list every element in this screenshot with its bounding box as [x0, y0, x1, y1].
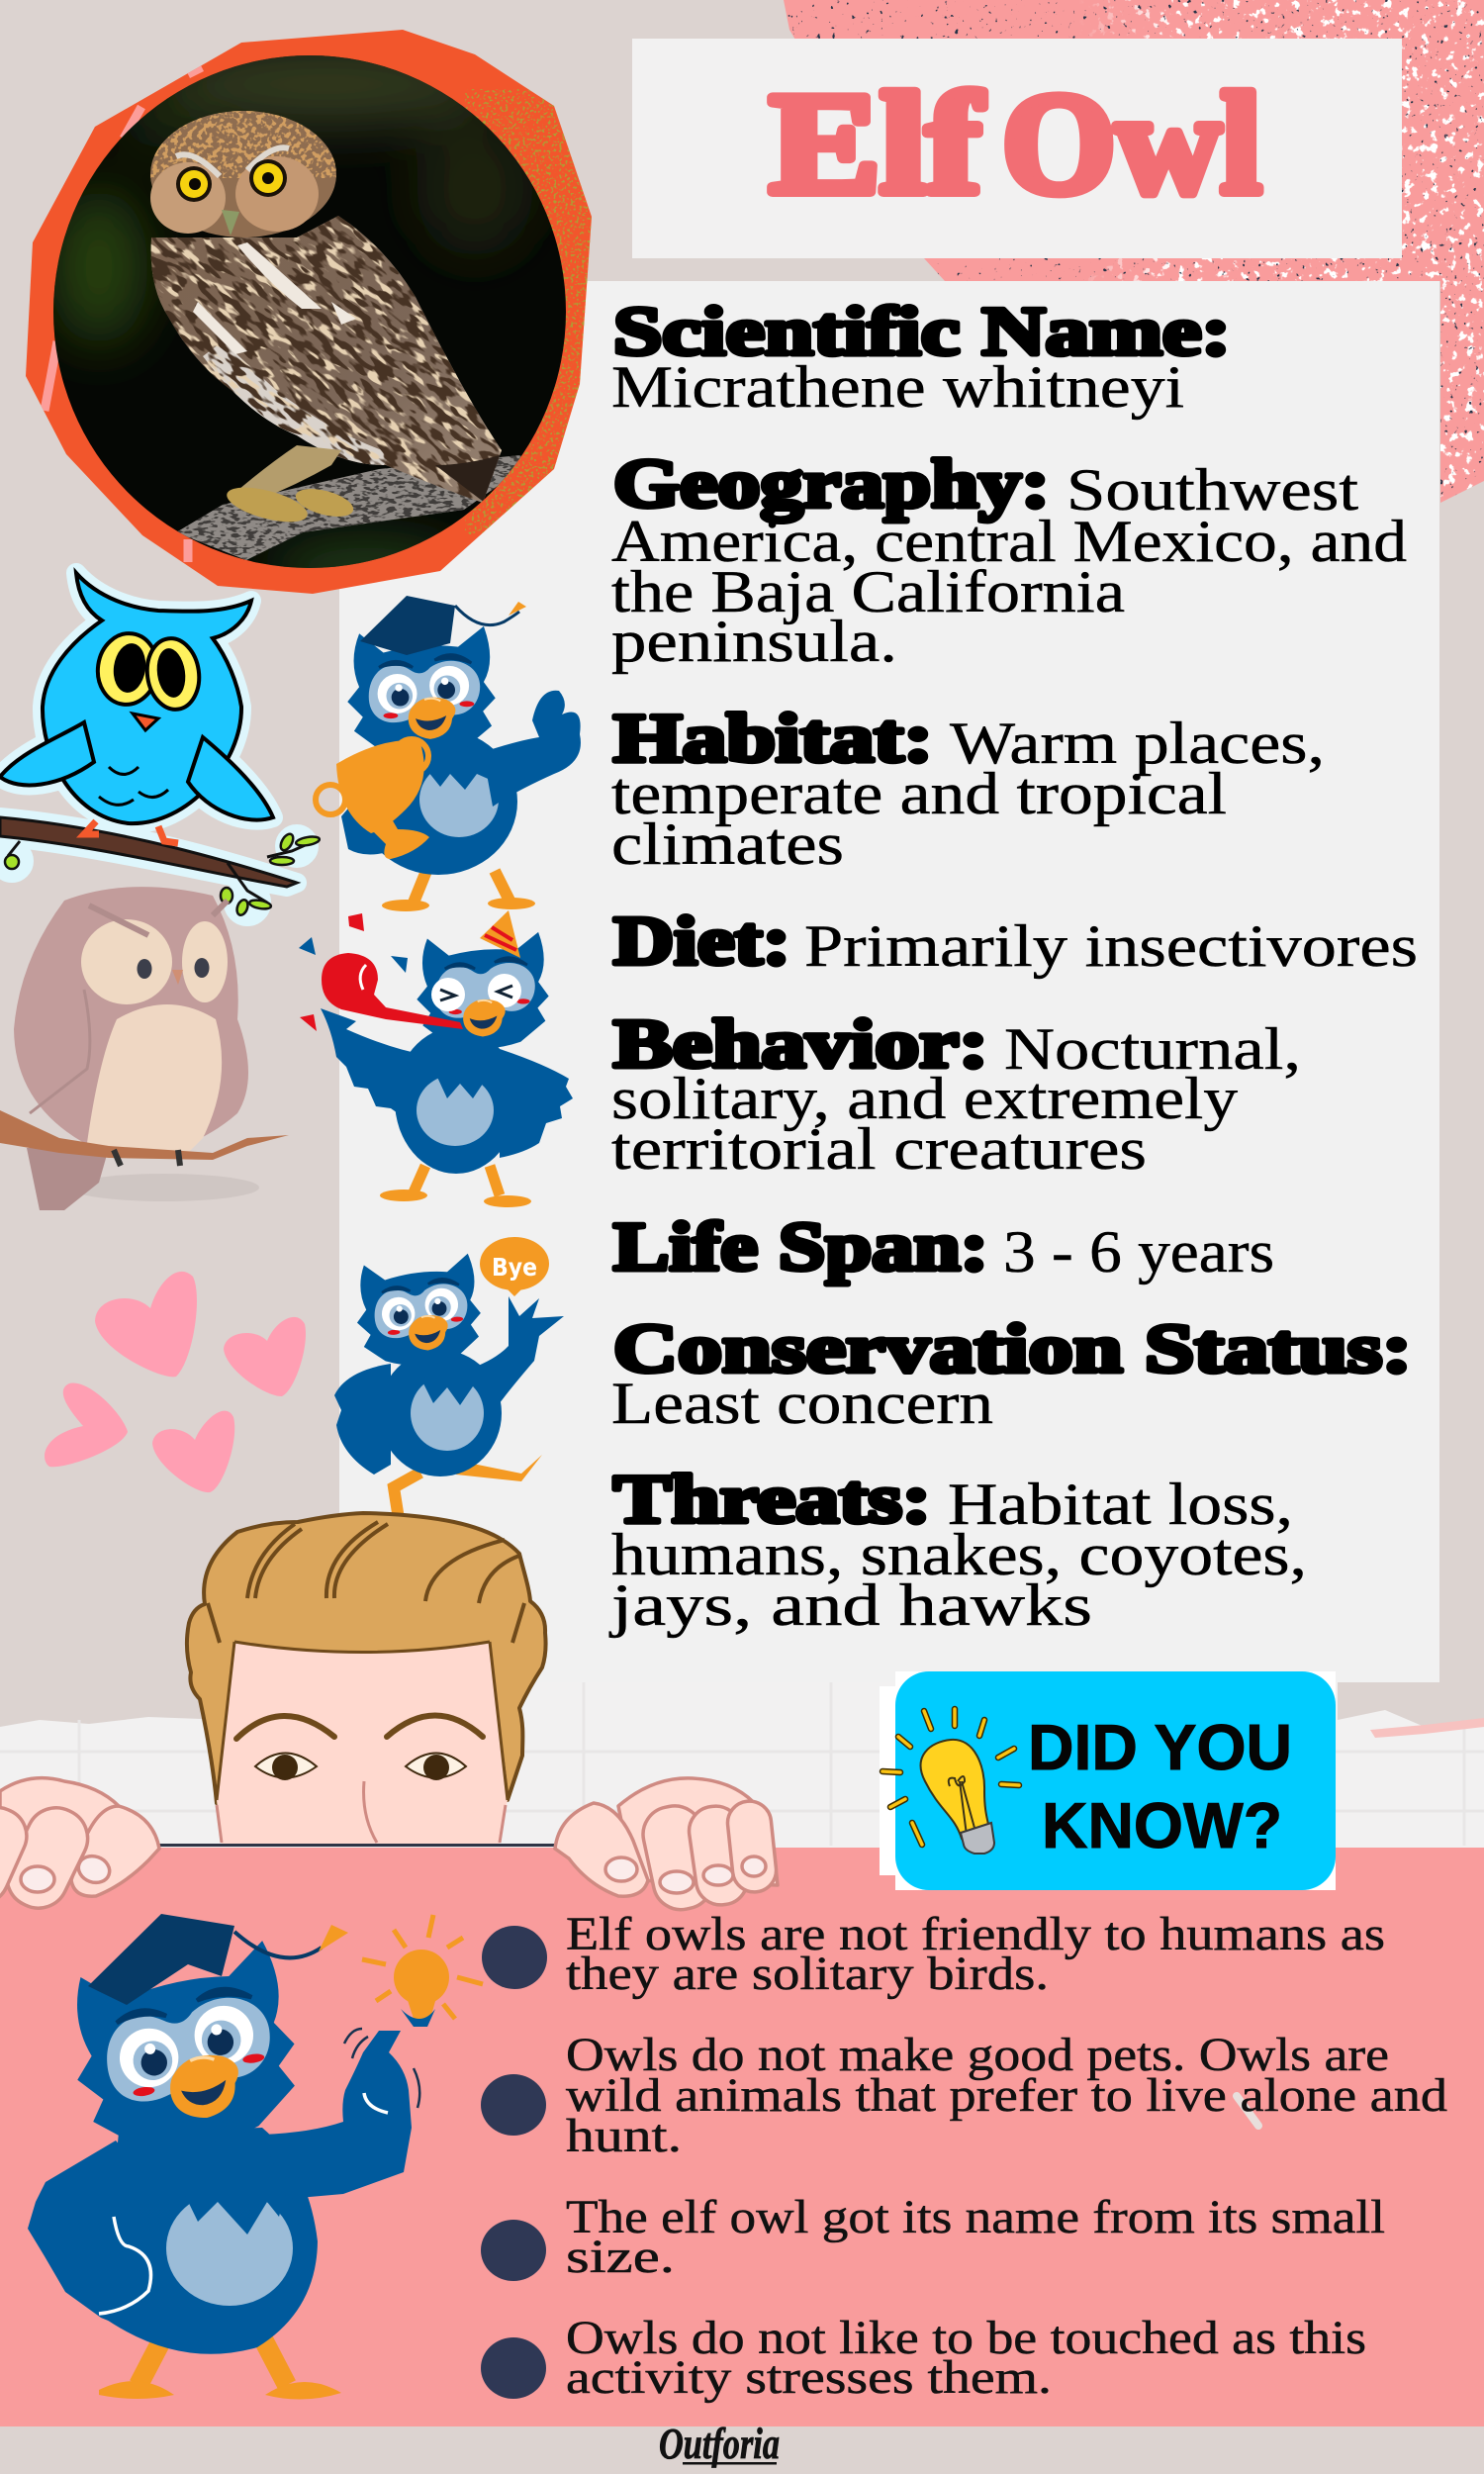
- icon: hearts: [45, 1272, 306, 1492]
- happy eyes: [431, 974, 521, 1011]
- face: [217, 1642, 508, 1845]
- fact: pets: hunt.: [566, 2110, 682, 2162]
- body: [43, 573, 251, 823]
- icon: idea bulb: [362, 1915, 483, 2027]
- icon: light bulb: [882, 1709, 1019, 1854]
- trophy: [395, 739, 428, 773]
- fact: habitat: temperate and tropical: [611, 761, 1227, 826]
- fact: friendliness: Elf owls are not friendly to humans as: [566, 1908, 1385, 1960]
- party blower: [322, 953, 463, 1029]
- fact: geography: Geography:: [613, 446, 1050, 523]
- small pale mark: [1237, 2096, 1258, 2126]
- fact: threats: [608, 1462, 1307, 1638]
- big cartoon owl with idea: [28, 1914, 483, 2400]
- photo: elf owl on branch: [26, 30, 592, 594]
- fact: scientific name: Micrathene whitneyi: [611, 354, 1184, 420]
- title box: [632, 39, 1402, 258]
- fact: behavior: territorial creatures: [611, 1116, 1147, 1182]
- fact: touching: activity stresses them.: [566, 2351, 1052, 2404]
- fact: geography: Southwest: [1067, 457, 1358, 523]
- legs: [241, 445, 341, 493]
- fact: behavior: Behavior:: [613, 1006, 988, 1083]
- fact: touching: Owls do not like to be touched as this: [566, 2312, 1366, 2364]
- graduation cap: [88, 1914, 234, 2005]
- sticker: blue owl on branch: [0, 573, 321, 916]
- fact: habitat: climates: [611, 811, 844, 877]
- fact: threats: jays, and hawks: [608, 1572, 1092, 1638]
- fact: geography: [611, 446, 1407, 674]
- did you know badge: [880, 1671, 1336, 1890]
- left hand: [0, 1778, 159, 1918]
- fact: life span: Life Span:: [613, 1209, 988, 1285]
- tabletop line: [158, 1844, 556, 1847]
- fact: touching: [566, 2312, 1366, 2404]
- did you know badge: KNOW?: [1042, 1789, 1282, 1861]
- title: [770, 63, 1261, 224]
- body: [151, 216, 502, 503]
- fact: diet: [613, 904, 1418, 980]
- fact: friendliness: they are solitary birds.: [566, 1948, 1049, 2000]
- fact: name origin: The elf owl got its name from its small: [566, 2191, 1385, 2243]
- head: [150, 111, 336, 238]
- fact: friendliness: [566, 1908, 1385, 2000]
- fact: habitat: [611, 701, 1325, 877]
- cartoon owl: party blower: [299, 910, 573, 1207]
- branch: [0, 817, 297, 887]
- fact: pets: Owls do not make good pets. Owls are: [566, 2029, 1389, 2081]
- cartoon owl: waving bye: [334, 1237, 564, 1519]
- bullet points: [481, 1926, 547, 2399]
- fact: geography: the Baja California: [611, 559, 1125, 624]
- speech bubble: Bye: [492, 1253, 537, 1282]
- fact: threats: Threats:: [613, 1462, 931, 1538]
- logo: Outforia: Outforia: [659, 2420, 780, 2468]
- graduation cap: [360, 596, 455, 655]
- cartoon owl: graduate with trophy: [316, 596, 581, 911]
- facts panel: [339, 281, 1439, 1682]
- fact: life span: [613, 1209, 1274, 1285]
- sticker: pink owl: [0, 887, 289, 1210]
- fact: name origin: [566, 2191, 1385, 2283]
- fact: behavior: [611, 1006, 1301, 1182]
- fact: name origin: size.: [566, 2231, 675, 2283]
- fact: habitat: Habitat:: [613, 701, 933, 777]
- fact: geography: America, central Mexico, and: [611, 509, 1407, 574]
- feathers: [193, 242, 356, 354]
- did you know badge: DID YOU: [1028, 1711, 1292, 1783]
- hair: [187, 1513, 546, 1803]
- right hand: [555, 1778, 779, 1915]
- fact: pets: wild animals that prefer to live alone and: [566, 2069, 1447, 2122]
- fact: conservation status: Least concern: [611, 1371, 993, 1436]
- fact: pets: [566, 2029, 1447, 2162]
- fact: diet: Primarily insectivores: [804, 913, 1418, 979]
- party hat: [480, 910, 520, 958]
- fact: life span: 3 - 6 years: [1003, 1219, 1274, 1285]
- title: Owl: [1002, 63, 1261, 224]
- fact: behavior: Nocturnal,: [1004, 1016, 1301, 1082]
- pink speckled backdrop: [784, 0, 1484, 515]
- fact: threats: Habitat loss,: [948, 1472, 1293, 1537]
- fact: behavior: solitary, and extremely: [611, 1066, 1238, 1131]
- torn tile band: [0, 1682, 1484, 1851]
- branch: [176, 455, 524, 560]
- fact: conservation status: [611, 1311, 1412, 1436]
- speech bubble: [480, 1237, 549, 1296]
- cartoon man peeking: [187, 1513, 546, 1845]
- fact: habitat: Warm places,: [950, 711, 1325, 776]
- fact: scientific name: Scientific Name:: [613, 294, 1231, 370]
- fact: conservation status: Conservation Status:: [613, 1311, 1412, 1387]
- fact: geography: peninsula.: [611, 609, 897, 674]
- fact: scientific name: [611, 294, 1231, 420]
- fact: diet: Diet:: [613, 904, 790, 980]
- title: Elf: [770, 63, 984, 224]
- pointing arm: [262, 2031, 412, 2199]
- fact: threats: humans, snakes, coyotes,: [611, 1522, 1307, 1587]
- pink facts band: [0, 1848, 1484, 2426]
